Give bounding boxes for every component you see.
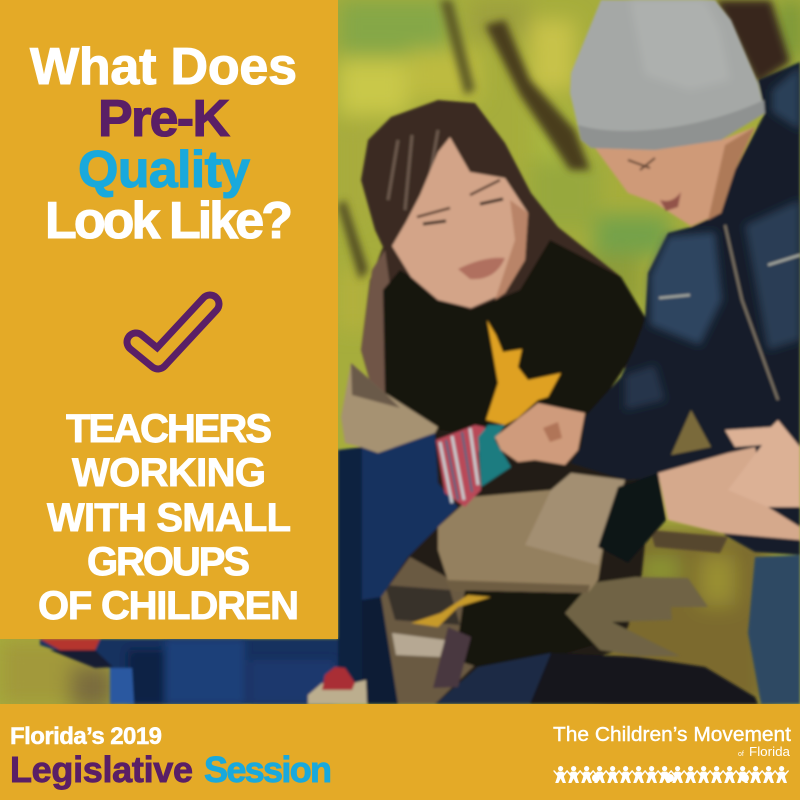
text: teachers working with small groups of children: TEACHERS — [66, 407, 272, 451]
fur collar — [383, 240, 648, 440]
boy jacket — [571, 62, 800, 555]
heading: What Does Pre-K Quality Look Like?: Pre-K — [98, 90, 230, 148]
boy face — [595, 127, 755, 226]
lower coat — [381, 557, 480, 704]
coat strap — [433, 627, 471, 688]
text: Florida's 2019: Florida’s 2019 — [10, 723, 162, 750]
text: Legislative Session: Legislative — [10, 749, 193, 790]
text: teachers working with small groups of children — [38, 407, 299, 628]
heading: What Does Pre-K Quality Look Like?: Look Like? — [45, 192, 293, 250]
bear patch — [308, 680, 367, 704]
knitted cuff — [436, 425, 485, 507]
boy hat — [570, 0, 765, 150]
panel: gold text panel — [0, 0, 338, 639]
falling leaf — [411, 595, 491, 627]
woman hair — [361, 100, 645, 410]
tan sleeve — [438, 473, 625, 593]
coat skirt right — [565, 577, 708, 656]
dark base behind figures — [380, 400, 660, 704]
logo: The Children's Movement of Florida: of — [738, 751, 744, 758]
navy sleeve — [40, 433, 458, 704]
text: teachers working with small groups of children: GROUPS — [87, 540, 250, 584]
text: Legislative Session — [10, 749, 332, 790]
logo: The Children's Movement of Florida — [553, 724, 791, 783]
coat shoulder — [341, 363, 438, 453]
dark under sleeve — [455, 590, 610, 667]
adult hands — [658, 447, 800, 540]
dark trousers — [435, 653, 758, 704]
text: teachers working with small groups of children: WORKING — [72, 451, 266, 495]
heading: What Does Pre-K Quality Look Like?: What Does — [30, 38, 297, 96]
black cuff — [598, 473, 666, 563]
tree trunks — [338, 0, 790, 280]
woman features — [417, 180, 500, 217]
heading: What Does Pre-K Quality Look Like? — [30, 38, 297, 250]
text: Legislative Session: Session — [204, 749, 332, 790]
woman face — [392, 137, 528, 308]
logo: The Children's Movement of Florida: Florida — [749, 744, 791, 759]
icon: paper-chain children — [553, 766, 789, 783]
icon: check mark — [136, 304, 210, 360]
heading: What Does Pre-K Quality Look Like?: Quality — [78, 141, 250, 199]
child hand — [495, 403, 585, 465]
coat flap — [650, 530, 728, 553]
text: teachers working with small groups of children: OF CHILDREN — [38, 584, 299, 628]
leaf — [486, 320, 561, 425]
jeans — [748, 555, 800, 704]
text: teachers working with small groups of children: WITH SMALL — [47, 496, 291, 540]
coat behind hand — [671, 410, 711, 455]
logo: The Children's Movement of Florida: The Children’s Movement — [553, 724, 791, 746]
panel: footer band — [0, 704, 800, 800]
